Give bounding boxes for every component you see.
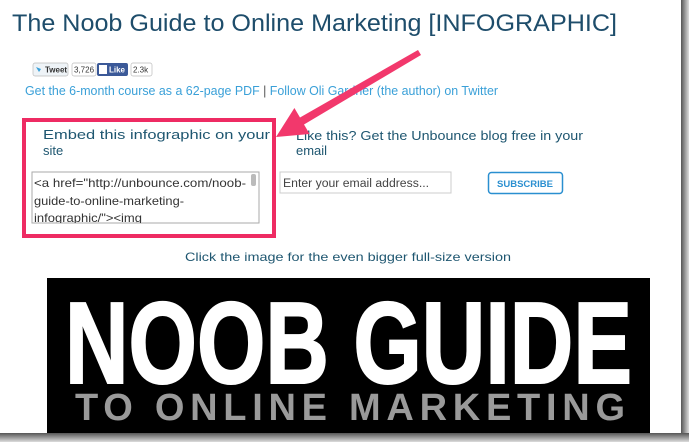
- panel: embed: [24, 120, 274, 236]
- banner subheading: TO ONLINE MARKETING: [75, 387, 625, 429]
- subscribe button: [488, 172, 562, 194]
- caption: Click the image for the even bigger full-size version: [185, 250, 511, 264]
- shadow: right edge: [681, 0, 689, 442]
- email input: [280, 172, 451, 193]
- tweet count: 3,726: [74, 66, 95, 74]
- infographic banner: [47, 278, 650, 433]
- textarea: infographic/"><img: [34, 211, 142, 225]
- textarea: [32, 172, 259, 225]
- panel: embed: site: [43, 143, 63, 158]
- email input: Enter your email address...: [283, 178, 429, 190]
- heading: subscribe: Like this? Get the Unbounce blog free in your: [296, 128, 584, 143]
- textarea: <a href="http://unbounce.com/noob-: [34, 176, 246, 190]
- arrow: [276, 50, 421, 137]
- social buttons: [33, 63, 152, 76]
- shadow: bottom edge: [0, 433, 689, 442]
- title: The Noob Guide to Online Marketing [INFOGRAPHIC]: [12, 10, 617, 37]
- subscribe button: SUBSCRIBE: [497, 179, 553, 190]
- highlight box: [24, 120, 274, 236]
- textarea: guide-to-online-marketing-: [34, 194, 184, 208]
- like button: Like: [109, 66, 126, 74]
- like count: 2.3k: [133, 66, 149, 74]
- links line: Get the 6-month course as a 62-page PDF | Follow Oli Gardner (the author) on Twitter: [25, 84, 498, 98]
- panel: subscribe: email: [296, 143, 327, 158]
- panel: subscribe: [280, 128, 584, 194]
- tweet button: Tweet: [45, 66, 67, 74]
- heading: embed: Embed this infographic on your: [43, 127, 271, 142]
